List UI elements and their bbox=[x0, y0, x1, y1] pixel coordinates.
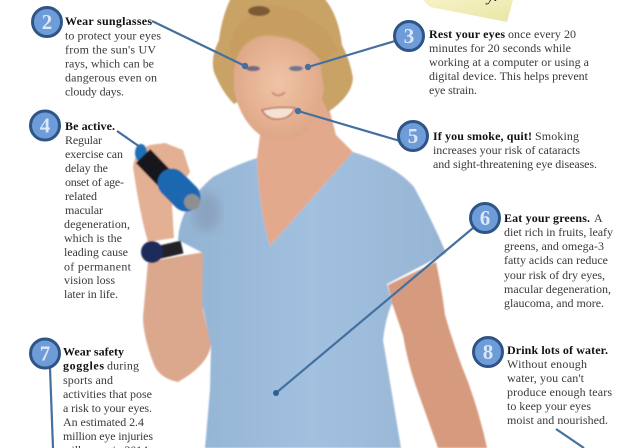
text 4: Be active. bbox=[65, 119, 115, 133]
leader line 6 bbox=[273, 228, 473, 396]
nose bbox=[272, 92, 285, 96]
leader line 5 bbox=[295, 108, 400, 141]
text 2: from the sun's UV bbox=[65, 42, 156, 56]
text 8: water, you can't bbox=[507, 371, 585, 385]
callout 3: rest your eyes bbox=[305, 22, 590, 97]
text 6: macular degeneration, bbox=[504, 282, 611, 296]
text 6: fatty acids can reduce bbox=[504, 253, 608, 267]
text 7 bbox=[63, 345, 153, 448]
callout 5: if you smoke, quit bbox=[295, 108, 597, 171]
text 2: Wear sunglasses bbox=[65, 14, 152, 28]
text 8 bbox=[507, 343, 612, 427]
text 3: minutes for 20 seconds while bbox=[429, 41, 571, 55]
face bbox=[234, 36, 324, 140]
text 5: and sight-threatening eye diseases. bbox=[433, 157, 597, 171]
text 7: sports and bbox=[63, 373, 113, 387]
text 4: exercise can bbox=[65, 147, 123, 161]
text 4: leading cause bbox=[64, 245, 128, 259]
text 4: delay the bbox=[65, 161, 108, 175]
text 8: moist and nourished. bbox=[507, 413, 608, 427]
text 4: vision loss bbox=[64, 273, 115, 287]
callout 2: wear sunglasses bbox=[32, 8, 248, 98]
text 7: activities that pose bbox=[63, 387, 152, 401]
badge 3 bbox=[394, 22, 424, 50]
text 4: which is the bbox=[64, 231, 122, 245]
leader line 8 bbox=[556, 429, 584, 448]
leader line 4 bbox=[117, 131, 140, 147]
text 6: A bbox=[594, 211, 603, 225]
callout 7: wear safety goggles bbox=[30, 339, 153, 448]
badge 4: 4 bbox=[40, 114, 51, 138]
text 6: diet rich in fruits, leafy bbox=[504, 225, 613, 239]
text 6: greens, and omega-3 bbox=[504, 239, 604, 253]
wristwatch bbox=[141, 241, 182, 263]
text 4: Regular bbox=[65, 133, 102, 147]
text 7: a risk to your eyes. bbox=[63, 401, 152, 415]
text 6: your risk of dry eyes, bbox=[504, 268, 605, 282]
text 2: to protect your eyes bbox=[65, 28, 161, 42]
text 3 bbox=[429, 27, 590, 97]
neck and chest bbox=[257, 90, 353, 246]
text 6 bbox=[504, 211, 613, 310]
text 2: cloudy days. bbox=[65, 84, 124, 98]
dark hair parting bbox=[248, 6, 270, 16]
text 4: later in life. bbox=[64, 287, 118, 301]
badge 6 bbox=[470, 204, 500, 232]
leader line 2 bbox=[152, 21, 248, 69]
text 3: once every 20 bbox=[508, 27, 576, 41]
badge 3: 3 bbox=[404, 24, 414, 48]
text 4: onset of age- bbox=[65, 175, 124, 189]
badge 2 bbox=[32, 8, 62, 36]
badge 6: 6 bbox=[480, 206, 490, 230]
text 4: degeneration, bbox=[64, 217, 130, 231]
text 8: Drink lots of water. bbox=[507, 343, 608, 357]
text 7: An estimated 2.4 bbox=[63, 415, 144, 429]
text 6: Eat your greens. bbox=[504, 211, 590, 225]
text 7: during bbox=[107, 359, 139, 373]
text 5: If you smoke, quit! bbox=[433, 129, 532, 143]
dumbbell bbox=[135, 144, 200, 210]
text 4: of permanent bbox=[64, 260, 132, 274]
badge 7: 7 bbox=[40, 342, 50, 366]
text 3: eye strain. bbox=[429, 83, 477, 97]
text 5: Smoking bbox=[535, 129, 579, 143]
text 2: rays, which can be bbox=[65, 56, 154, 70]
badge 4 bbox=[30, 111, 60, 140]
sticky note bbox=[423, 0, 513, 22]
mouth bbox=[262, 107, 295, 119]
badge 5: 5 bbox=[408, 124, 418, 148]
hair fringe bbox=[230, 5, 338, 66]
text 4: macular bbox=[65, 203, 103, 217]
text 7: goggles bbox=[63, 359, 104, 373]
text 8: Without enough bbox=[507, 357, 587, 371]
callout 6: eat your greens bbox=[273, 204, 613, 396]
eyes bbox=[246, 66, 303, 71]
text 7: Wear safety bbox=[63, 345, 124, 359]
text 7: million eye injuries bbox=[63, 429, 153, 443]
text 3: working at a computer or using a bbox=[429, 55, 590, 69]
leader line 3 bbox=[305, 41, 395, 70]
shadow on shirt behind dumbbell bbox=[193, 192, 221, 232]
shirt bbox=[178, 152, 446, 448]
photo: woman with dumbbell bbox=[133, 0, 487, 448]
text 3: Rest your eyes bbox=[429, 27, 505, 41]
text 4 bbox=[64, 119, 132, 301]
badge 5 bbox=[398, 122, 428, 150]
text 2: dangerous even on bbox=[65, 70, 157, 84]
text 5: increases your risk of cataracts bbox=[433, 143, 580, 157]
text 8: produce enough tears bbox=[507, 385, 612, 399]
text 2 bbox=[65, 14, 161, 98]
leader line 7 bbox=[50, 368, 53, 448]
hair back bbox=[213, 0, 353, 112]
left forearm bbox=[143, 252, 211, 382]
text 6: glaucoma, and more. bbox=[504, 296, 604, 310]
text 3: digital device. This helps prevent bbox=[429, 69, 589, 83]
callout 8: drink lots of water bbox=[474, 338, 612, 448]
badge 2: 2 bbox=[42, 10, 52, 34]
text 8: to keep your eyes bbox=[507, 399, 591, 413]
badge 8: 8 bbox=[483, 340, 493, 364]
right arm bbox=[388, 262, 487, 448]
hand bbox=[133, 143, 190, 242]
callout 4: be active bbox=[30, 111, 140, 301]
text 4: related bbox=[65, 189, 97, 203]
text 5 bbox=[433, 129, 597, 171]
